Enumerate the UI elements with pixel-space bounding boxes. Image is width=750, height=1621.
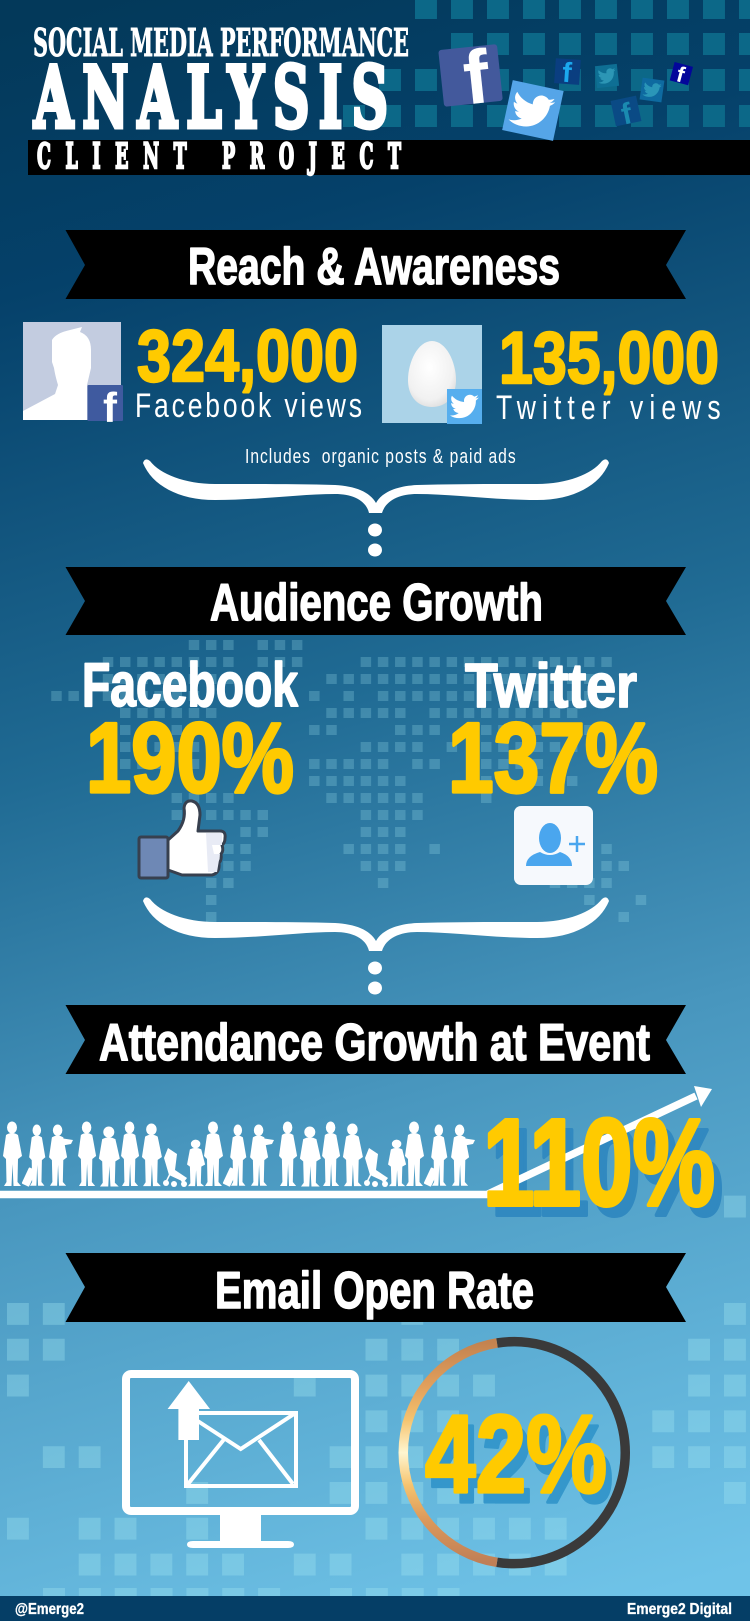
icon: small facebook 3: f (674, 61, 688, 88)
banner: reach and awareness: Reach & Awareness (188, 238, 560, 296)
brace connector 1 (143, 459, 609, 556)
title line 2: ANALYSIS (33, 49, 388, 148)
title line 1: SOCIAL MEDIA PERFORMANCE (33, 20, 409, 65)
stat: twitter growth: Twitter (465, 652, 637, 721)
stat: facebook growth: Facebook (82, 651, 298, 720)
banner: audience growth (66, 567, 686, 635)
icon: small twitter 2 (640, 78, 664, 102)
bottom pixel grid (7, 1207, 746, 1565)
subtitle bar (28, 140, 750, 175)
banner: audience growth: Audience Growth (210, 574, 543, 632)
icon: small twitter 1 (595, 64, 619, 88)
footer left handle: @Emerge2 (15, 1601, 84, 1618)
stat: email open rate shadow: 42% (431, 1403, 613, 1526)
upload arrow (168, 1381, 210, 1440)
stat: email open rate: 42% (425, 1393, 607, 1516)
monitor frame (126, 1374, 355, 1511)
stat: facebook growth (82, 651, 298, 813)
world map pixel grid (51, 645, 646, 917)
banner: reach and awareness (66, 230, 686, 299)
note: includes organic posts and paid ads: Includes organic posts & paid ads (245, 445, 516, 467)
bottom pixel grid, cut row (43, 1588, 473, 1596)
monitor stand (187, 1515, 294, 1548)
icon: small facebook 1: f (561, 57, 573, 88)
icon: thumbs up (139, 801, 225, 878)
icon: small facebook 3 (669, 60, 694, 89)
arrow: growth line (0, 1086, 712, 1194)
title block (33, 20, 409, 148)
icon: small facebook 1 (554, 56, 581, 89)
icon: twitter profile egg (382, 325, 482, 424)
stat: facebook views label: Facebook views (135, 387, 362, 425)
icon: small facebook 2: f (618, 97, 636, 132)
footer right name: Emerge2 Digital (627, 1601, 732, 1618)
icon: facebook profile: f (103, 384, 118, 431)
footer bar (0, 1596, 750, 1621)
stat: twitter growth (448, 652, 658, 813)
stat: facebook growth: 190% (86, 702, 294, 813)
banner: email open rate: Email Open Rate (215, 1262, 534, 1320)
icon: add user (514, 806, 593, 885)
icon: monitor with email (126, 1374, 355, 1548)
icon: facebook profile (23, 322, 123, 431)
subtitle text: CLIENT PROJECT (37, 135, 401, 177)
stat: facebook views number: 324,000 (137, 316, 358, 397)
banner: email open rate (66, 1253, 686, 1322)
icon: facebook: f (459, 34, 494, 121)
donut chart: 42 percent (403, 1342, 625, 1564)
icon: twitter (502, 80, 564, 141)
icon: facebook (437, 33, 505, 124)
icon: small facebook 2 (611, 96, 643, 133)
envelope (186, 1413, 296, 1486)
stat: twitter views label: Twitter views (496, 389, 721, 427)
brace connector 2 (143, 897, 609, 994)
header pixel grid (343, 8, 750, 116)
crowd silhouettes (3, 1122, 475, 1187)
stat: twitter growth: 137% (448, 702, 658, 813)
